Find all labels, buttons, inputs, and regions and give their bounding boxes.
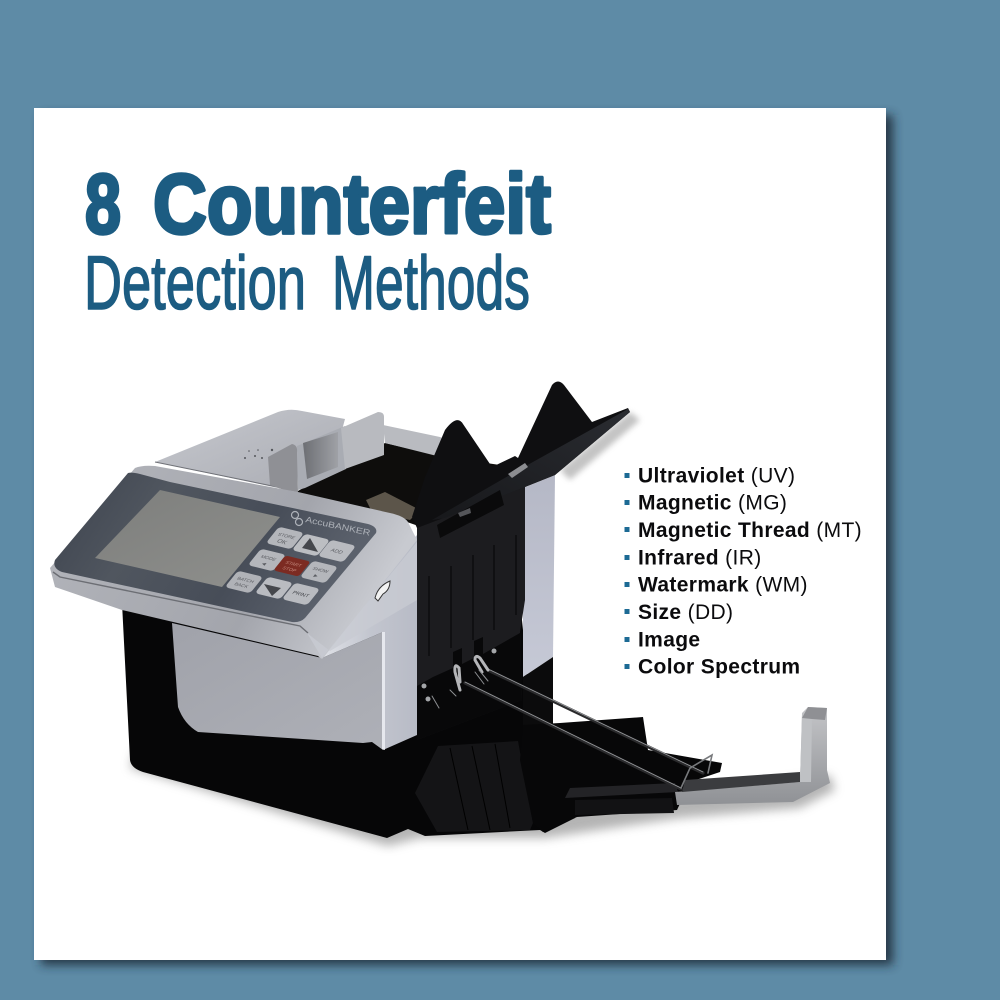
- upper tray surface: [432, 409, 630, 520]
- arm dark top: [682, 772, 800, 792]
- button: store ok: STORE: [276, 532, 297, 541]
- title: [84, 157, 551, 326]
- button: up: [292, 534, 330, 556]
- button: add: ADD: [329, 548, 344, 555]
- wire lower: [465, 683, 681, 789]
- button: start stop: STOP: [281, 566, 297, 574]
- hook right: [475, 656, 488, 672]
- wire upper: [488, 670, 703, 773]
- arm upright cap: [802, 707, 827, 720]
- title line 2: Methods: [332, 241, 530, 326]
- top silver cover: [155, 410, 345, 492]
- item: Watermark: Watermark (WM): [638, 574, 808, 596]
- button: print: PRINT: [291, 590, 311, 599]
- silver extension arm: [675, 707, 830, 805]
- tray shadow: [560, 412, 640, 480]
- note guide backdrop: [297, 426, 346, 490]
- button: show: SHOW: [311, 566, 330, 575]
- black output compartment: [296, 443, 500, 530]
- wire loop: [681, 755, 712, 788]
- note guide back: [341, 412, 384, 469]
- corner highlight: [382, 632, 385, 750]
- spring clips: [432, 670, 488, 708]
- button: mode: ◄: [259, 561, 268, 567]
- item: Color Spectrum: Color Spectrum: [638, 656, 800, 678]
- button: mode: [248, 549, 286, 571]
- console rim: [50, 466, 417, 659]
- button: store ok: OK: [275, 538, 289, 546]
- LCD screen: [95, 490, 280, 587]
- note wire support: [432, 656, 712, 789]
- keypad: [225, 527, 356, 605]
- button: mode: MODE: [259, 554, 278, 563]
- brand logo: [292, 512, 371, 538]
- button: batch back: BACK: [233, 582, 250, 590]
- product: currency counter machine: [50, 382, 835, 846]
- button: show: ►: [311, 573, 320, 579]
- machine ground shadow: [130, 750, 835, 846]
- button: store ok: [266, 527, 304, 549]
- item: Size: Size (DD): [638, 601, 733, 624]
- arm upright face: [800, 715, 812, 782]
- black panel under silver: [523, 657, 553, 725]
- wire highlights: [465, 669, 703, 788]
- black rear plate: [417, 485, 525, 740]
- side latch: [375, 581, 390, 601]
- plate slots: [429, 535, 516, 656]
- card shadow: [41, 115, 893, 965]
- note guide front: [268, 444, 298, 492]
- white card: [34, 108, 886, 960]
- plate screws: [422, 648, 496, 702]
- hopper ribs: [450, 744, 510, 830]
- button: start stop: START: [284, 560, 303, 569]
- cover dots: [244, 449, 273, 459]
- button: down: [255, 577, 293, 599]
- output tray black: [520, 717, 722, 832]
- console bevel: [307, 542, 417, 658]
- lower feed hopper: [415, 741, 533, 832]
- tray and fins silhouette: [412, 382, 630, 528]
- right silver side: [322, 535, 417, 750]
- tray highlight: [565, 783, 678, 798]
- brand name: AccuBANKER: [305, 514, 371, 538]
- cover seam: [155, 462, 297, 491]
- item: Ultraviolet: Ultraviolet (UV): [638, 464, 795, 488]
- icon: down triangle: [264, 584, 281, 596]
- item: Magnetic: Magnetic (MG): [638, 492, 787, 514]
- logo rings: [292, 512, 302, 526]
- console front lip shadow line: [53, 572, 308, 633]
- tray slot details: [437, 490, 504, 538]
- lower silver panel: [172, 623, 383, 750]
- bullet list: detection methods: [624, 464, 862, 678]
- notes slot detail: [366, 492, 420, 520]
- button: batch back: [225, 571, 263, 593]
- note guide inner: [303, 432, 338, 479]
- title line 1: 8: [85, 157, 121, 251]
- silver right panel: [523, 475, 555, 677]
- control panel dark face: [54, 473, 376, 622]
- button: show: [300, 561, 338, 583]
- item: Magnetic Thread: Magnetic Thread (MT): [638, 519, 862, 542]
- black base: [122, 600, 575, 838]
- item: Infrared: Infrared (IR): [638, 546, 762, 570]
- button: start stop: [273, 555, 311, 577]
- icon: up triangle: [302, 538, 318, 552]
- title line 2: Detection: [84, 241, 306, 326]
- hook left: [455, 666, 460, 690]
- title line 1: Counterfeit: [153, 157, 551, 251]
- button: batch back: BATCH: [235, 576, 256, 585]
- compartment metal rim: [383, 425, 468, 458]
- item: Image: Image: [638, 628, 700, 652]
- plate lower dark band: [417, 633, 522, 740]
